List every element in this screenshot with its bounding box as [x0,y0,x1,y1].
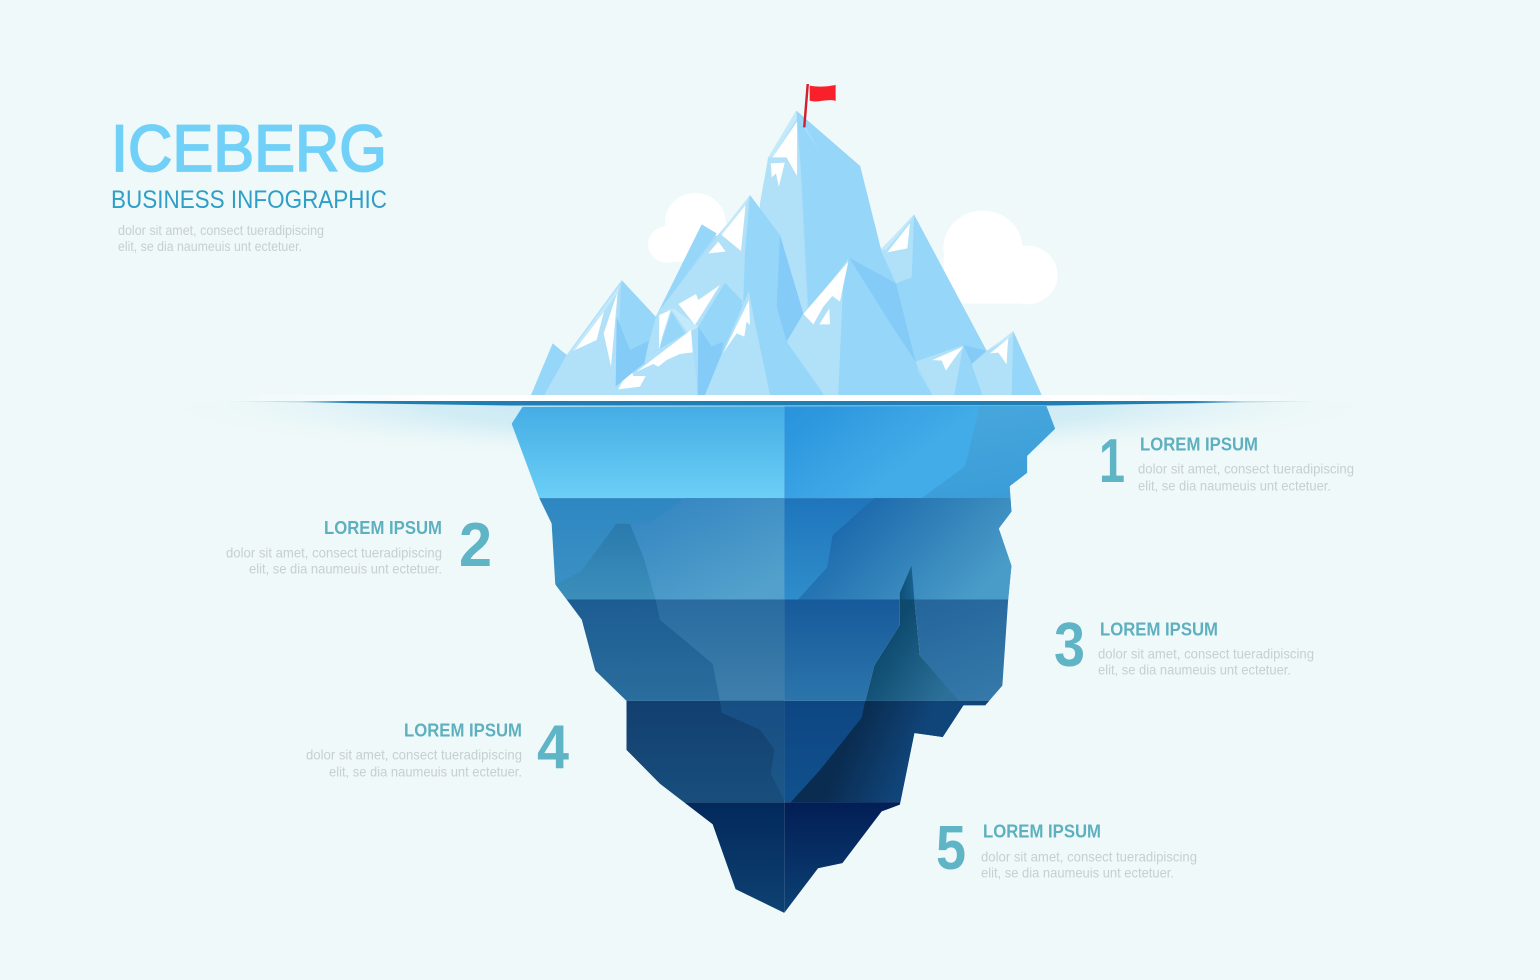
lower left slope [617,330,698,395]
text 5 [981,848,1197,880]
text 5: elit, se dia naumeuis unt ectetuer. [981,864,1174,880]
number 4: 4 [537,713,569,782]
heading: ICEBERG [111,111,387,185]
item 1 [1099,427,1354,496]
iceberg above water [531,111,1042,395]
water glow [130,402,1410,466]
right back peak [881,214,987,362]
main peak [744,111,918,395]
description [118,222,324,254]
text 2 [226,544,442,576]
heading 3: LOREM IPSUM [1100,620,1218,640]
tier 5 [684,802,900,913]
description: dolor sit amet, consect tueradipiscing [118,222,324,238]
left centre peak [645,195,803,357]
tier 3 [566,600,1008,701]
text 3: dolor sit amet, consect tueradipiscing [1098,646,1314,662]
number 3: 3 [1054,611,1085,680]
iceberg below water [500,405,1075,917]
item 2 [226,511,492,580]
text 3: elit, se dia naumeuis unt ectetuer. [1098,662,1291,678]
text 3 [1098,646,1314,678]
middle small peak [658,283,752,395]
item 4 [306,713,569,782]
tier 2 [539,498,1012,600]
text 4 [306,746,522,780]
item 5 [936,814,1197,883]
front centre peak [705,291,824,395]
heading 5: LOREM IPSUM [983,822,1101,842]
heading 1: LOREM IPSUM [1140,434,1258,454]
heading 2: LOREM IPSUM [324,518,442,538]
right small peaks [916,331,1042,395]
number 5: 5 [936,814,966,883]
number 1: 1 [1099,427,1125,496]
tier 4 [626,700,990,802]
text 2: dolor sit amet, consect tueradipiscing [226,544,442,560]
text 1 [1138,460,1354,494]
front right peak [787,258,932,395]
waterline [205,395,1340,406]
text 4: dolor sit amet, consect tueradipiscing [306,746,522,762]
backing silhouette [535,112,1040,395]
title block [111,111,387,254]
text 1: dolor sit amet, consect tueradipiscing [1138,460,1354,476]
text 1: elit, se dia naumeuis unt ectetuer. [1138,478,1331,494]
text 2: elit, se dia naumeuis unt ectetuer. [249,560,442,576]
clouds [648,193,1058,304]
tier 1 [500,405,1075,498]
flag [803,84,836,127]
left peak [531,280,656,395]
number 2: 2 [459,511,492,580]
heading 4: LOREM IPSUM [404,720,522,740]
item 3 [1054,611,1314,680]
text 4: elit, se dia naumeuis unt ectetuer. [329,764,522,780]
description: elit, se dia naumeuis unt ectetuer. [118,238,302,254]
subheading: BUSINESS INFOGRAPHIC [111,186,387,214]
text 5: dolor sit amet, consect tueradipiscing [981,848,1197,864]
